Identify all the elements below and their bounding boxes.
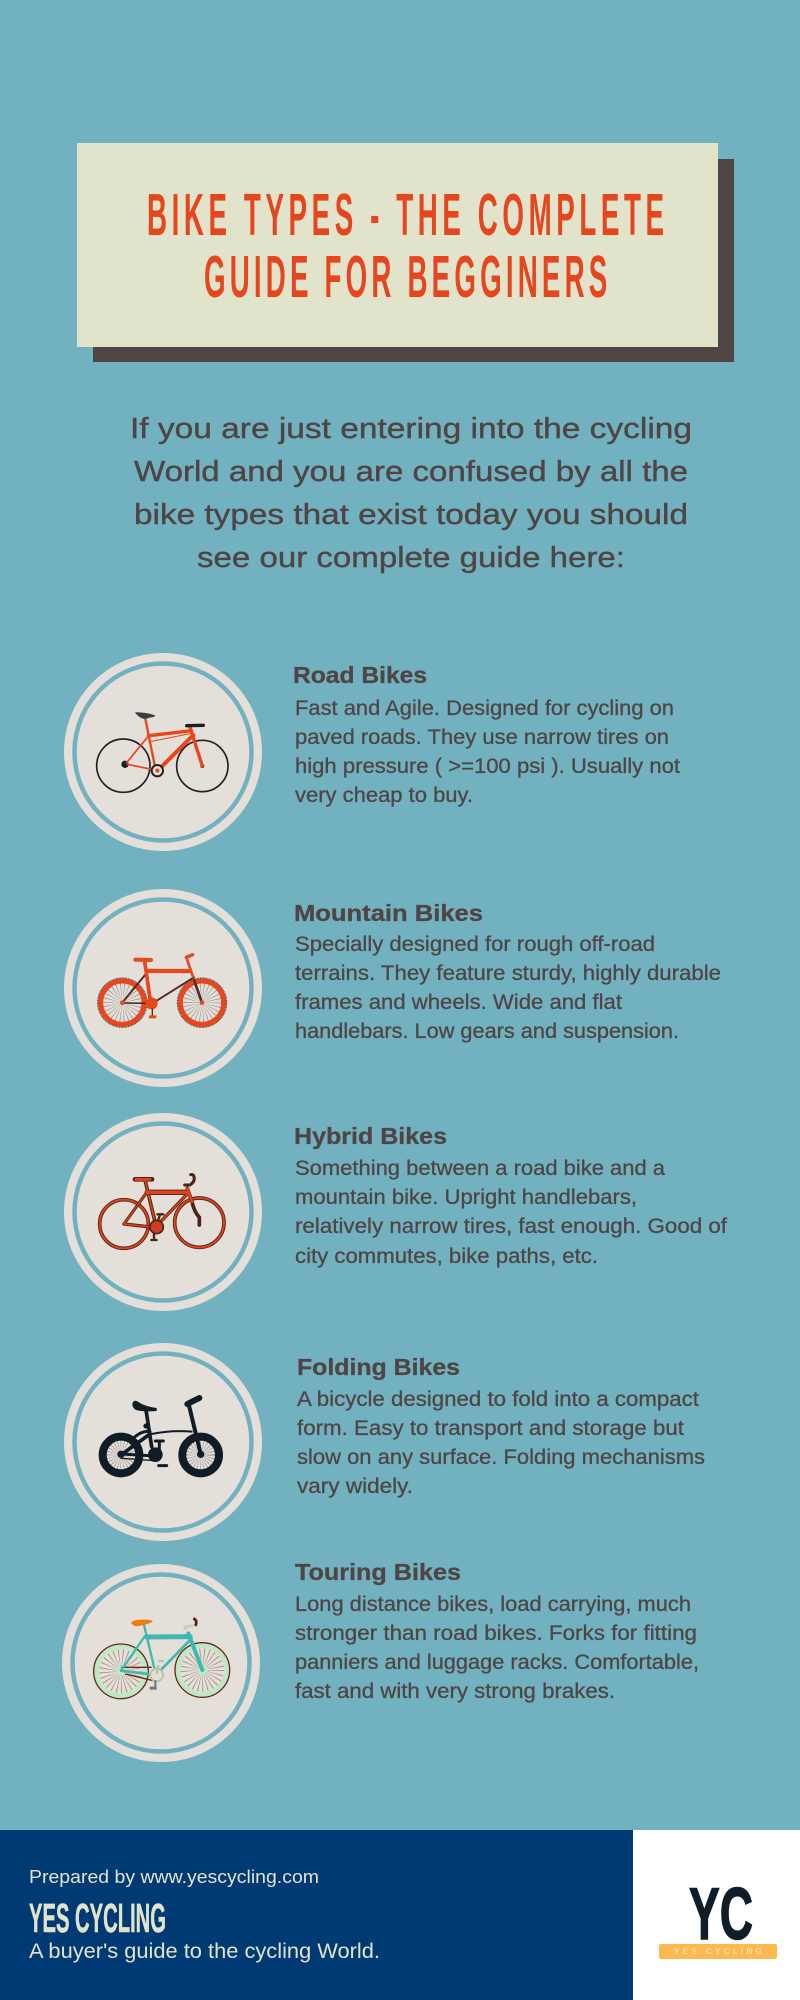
intro text: World and you are confused by all the (134, 456, 688, 488)
icon: folding bike (103, 1398, 219, 1473)
description (297, 1388, 705, 1498)
title box (77, 143, 718, 347)
heading: Mountain Bikes (294, 900, 483, 926)
footer: YES CYCLING (29, 1895, 166, 1941)
intro text (130, 413, 692, 574)
intro text: see our complete guide here: (197, 542, 625, 574)
description: stronger than road bikes. Forks for fitting (295, 1622, 697, 1645)
description: mountain bike. Upright handlebars, (295, 1186, 637, 1209)
intro text: If you are just entering into the cycling (130, 413, 692, 445)
icon: road bike (97, 712, 228, 792)
title panel (77, 143, 734, 362)
description: very cheap to buy. (295, 784, 473, 807)
badge circle (64, 1343, 262, 1541)
title shadow (93, 159, 734, 362)
title text: BIKE TYPES - THE COMPLETE (147, 181, 664, 248)
heading: Hybrid Bikes (294, 1123, 447, 1149)
description: frames and wheels. Wide and flat (295, 991, 622, 1014)
logo ribbon (659, 1944, 777, 1959)
description: high pressure ( >=100 psi ). Usually not (295, 755, 680, 778)
description: Something between a road bike and a (295, 1157, 665, 1180)
badge circle (64, 889, 262, 1087)
description: slow on any surface. Folding mechanisms (297, 1446, 705, 1469)
logo letters: YC (689, 1874, 753, 1955)
description (295, 933, 721, 1043)
description (295, 697, 680, 807)
tagline: A buyer's guide to the cycling World. (29, 1940, 380, 1963)
heading: Touring Bikes (295, 1559, 461, 1585)
logo panel (633, 1830, 800, 2000)
footer band (0, 1830, 633, 2000)
heading: Road Bikes (293, 662, 427, 688)
description: Specially designed for rough off-road (295, 933, 655, 956)
panel: touring bikes (62, 1559, 699, 1762)
title text (147, 181, 664, 310)
title text: GUIDE FOR BEGGINERS (204, 243, 607, 310)
description: paved roads. They use narrow tires on (295, 726, 669, 749)
icon: hybrid bike (100, 1175, 224, 1248)
description: fast and with very strong brakes. (295, 1680, 615, 1703)
description: panniers and luggage racks. Comfortable, (295, 1651, 699, 1674)
heading: Folding Bikes (297, 1354, 460, 1380)
prepared by line: Prepared by www.yescycling.com (29, 1867, 319, 1887)
panel: road bikes (64, 653, 680, 851)
icon: touring bike (94, 1618, 230, 1699)
footer (0, 1830, 800, 2000)
panel: hybrid bikes (64, 1113, 727, 1311)
description: vary widely. (297, 1475, 413, 1498)
description: Long distance bikes, load carrying, much (295, 1593, 691, 1616)
badge circle (62, 1564, 260, 1762)
description: relatively narrow tires, fast enough. Good of (295, 1215, 727, 1238)
description: Fast and Agile. Designed for cycling on (295, 697, 674, 720)
icon: mountain bike (98, 955, 226, 1027)
description: city commutes, bike paths, etc. (295, 1245, 598, 1268)
description: A bicycle designed to fold into a compact (297, 1388, 699, 1411)
description (295, 1593, 699, 1703)
panel: mountain bikes (64, 889, 721, 1087)
panel: folding bikes (64, 1343, 705, 1541)
badge circle (64, 1113, 262, 1311)
intro text: bike types that exist today you should (134, 499, 688, 531)
description (295, 1157, 727, 1268)
logo ribbon text: YES CYCLING (674, 1947, 762, 1956)
description: terrains. They feature sturdy, highly durable (295, 962, 721, 985)
description: handlebars. Low gears and suspension. (295, 1020, 679, 1043)
description: form. Easy to transport and storage but (297, 1417, 684, 1440)
badge circle (64, 653, 262, 851)
